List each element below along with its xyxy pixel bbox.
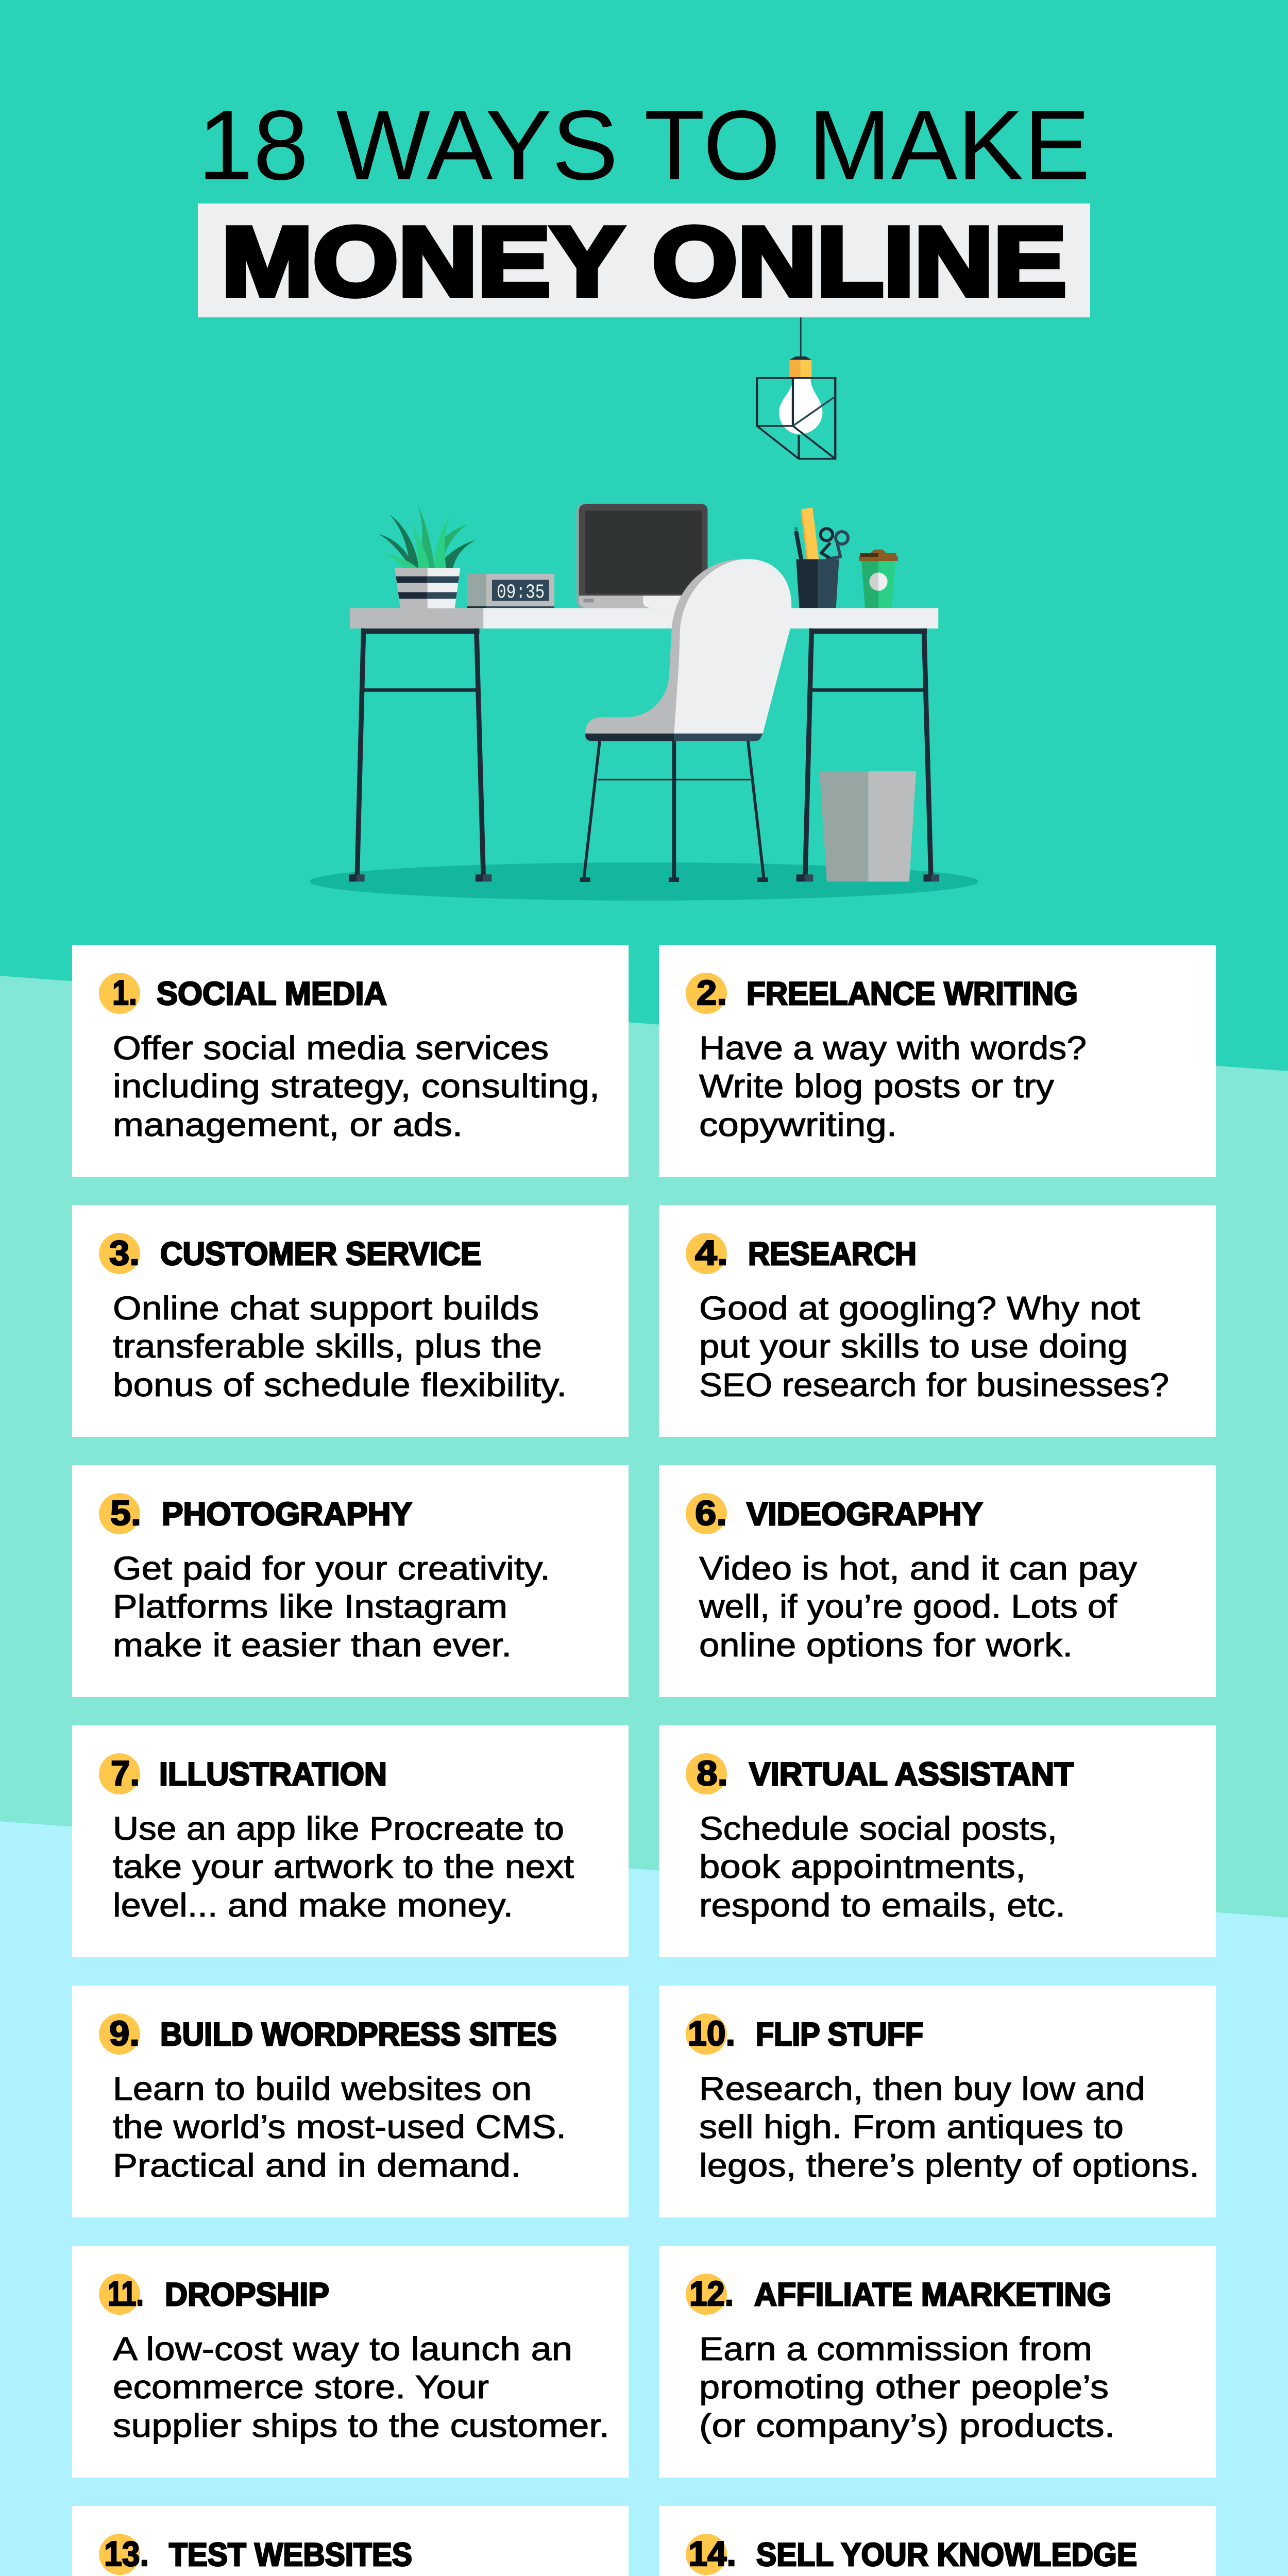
card background — [659, 2246, 1216, 2478]
body text: Use an app like Procreate to — [113, 1810, 564, 1847]
body text: book appointments, — [699, 1848, 1026, 1885]
body text: Earn a commission from — [699, 2330, 1092, 2367]
number badge — [99, 2274, 140, 2315]
heading: SOCIAL MEDIA — [157, 976, 387, 1012]
title line: 18 ways to make: 18 WAYS TO MAKE — [198, 90, 1090, 200]
icon: potted plant — [378, 505, 476, 608]
number badge — [99, 1233, 140, 1274]
card 14: sell your knowledge — [659, 2506, 1216, 2576]
body text: Schedule social posts, — [699, 1810, 1057, 1847]
icon: coffee cup — [859, 550, 898, 608]
heading: RESEARCH — [748, 1236, 917, 1272]
heading: AFFILIATE MARKETING — [754, 2277, 1111, 2313]
card 7: illustration — [72, 1725, 629, 1957]
number badge — [686, 2013, 727, 2055]
body text — [699, 1550, 1137, 1664]
heading: FLIP STUFF — [756, 2016, 923, 2053]
icon: chair — [580, 559, 791, 882]
card background — [659, 1725, 1216, 1957]
heading: PHOTOGRAPHY — [162, 1496, 412, 1532]
body text: promoting other people’s — [699, 2368, 1109, 2405]
card 11: dropship — [72, 2246, 629, 2478]
body text: Research, then buy low and — [699, 2070, 1145, 2107]
heading: CUSTOMER SERVICE — [160, 1236, 481, 1272]
card background — [659, 1465, 1216, 1697]
body text: supplier ships to the customer. — [113, 2407, 609, 2444]
card background — [659, 2506, 1216, 2576]
desk top — [350, 608, 938, 629]
card 12: affiliate marketing — [659, 2246, 1216, 2478]
heading: DROPSHIP — [165, 2277, 329, 2313]
card background — [72, 2246, 629, 2478]
number: 8. — [697, 1754, 728, 1793]
body text: the world’s most-used CMS. — [113, 2108, 566, 2145]
number badge — [686, 2274, 727, 2315]
card 6: videography — [659, 1465, 1216, 1697]
heading: TEST WEBSITES — [169, 2537, 412, 2573]
card 1: social media — [72, 945, 629, 1177]
body text: online options for work. — [699, 1626, 1073, 1664]
number badge — [686, 1493, 727, 1534]
number: 4. — [695, 1233, 728, 1273]
number: 1. — [112, 973, 137, 1012]
card 3: customer service — [72, 1205, 629, 1437]
body text — [699, 1290, 1169, 1403]
number: 6. — [695, 1494, 727, 1533]
icon: monitor — [577, 504, 707, 608]
number: 11. — [108, 2274, 144, 2313]
card 13: test websites — [72, 2506, 629, 2576]
heading: VIDEOGRAPHY — [747, 1496, 983, 1532]
desk legs left — [349, 629, 492, 882]
icon: digital clock — [467, 574, 554, 608]
body text — [113, 1029, 600, 1143]
card background — [72, 945, 629, 1177]
body text: (or company’s) products. — [699, 2407, 1115, 2444]
body text: legos, there’s plenty of options. — [699, 2147, 1199, 2184]
body text: Offer social media services — [113, 1029, 549, 1066]
body text — [699, 1029, 1087, 1143]
body text: make it easier than ever. — [113, 1626, 512, 1664]
card background — [72, 1986, 629, 2217]
number: 13. — [104, 2534, 149, 2573]
card 8: virtual assistant — [659, 1725, 1216, 1957]
heading: SELL YOUR KNOWLEDGE — [756, 2537, 1137, 2573]
body text — [113, 1290, 567, 1403]
number badge — [99, 2534, 140, 2575]
illustration: desk scene — [310, 317, 978, 901]
body text: Video is hot, and it can pay — [699, 1550, 1137, 1587]
desk legs right — [796, 629, 939, 882]
body text — [113, 1550, 550, 1664]
body text: management, or ads. — [113, 1106, 463, 1143]
icon: digital clock: 09:35 — [497, 581, 545, 604]
body text: Good at googling? Why not — [699, 1290, 1140, 1327]
body text — [113, 2070, 566, 2184]
number: 3. — [109, 1233, 140, 1273]
card 9: build wordpress sites — [72, 1986, 629, 2217]
card 4: research — [659, 1205, 1216, 1437]
card background — [659, 1986, 1216, 2217]
body text: Practical and in demand. — [113, 2147, 521, 2184]
heading: BUILD WORDPRESS SITES — [160, 2016, 557, 2053]
body text: respond to emails, etc. — [699, 1887, 1065, 1924]
number badge — [99, 2013, 140, 2055]
number badge — [686, 1753, 727, 1794]
body text: take your artwork to the next — [113, 1848, 574, 1885]
body text — [113, 1810, 574, 1924]
body text: A low-cost way to launch an — [113, 2330, 572, 2367]
body text — [113, 2330, 609, 2444]
floor shadow — [310, 862, 978, 901]
body text: Write blog posts or try — [699, 1067, 1054, 1105]
card 2: freelance writing — [659, 945, 1216, 1177]
card background — [72, 1465, 629, 1697]
body text — [699, 1810, 1065, 1924]
body text: Online chat support builds — [113, 1290, 539, 1327]
card 5: photography — [72, 1465, 629, 1697]
number badge — [99, 973, 140, 1014]
card background — [72, 1205, 629, 1437]
icon: hanging lamp — [757, 317, 835, 459]
number: 5. — [110, 1494, 141, 1533]
icon: trash can — [820, 771, 916, 882]
heading: ILLUSTRATION — [159, 1756, 387, 1792]
body text: sell high. From antiques to — [699, 2108, 1124, 2145]
body text — [699, 2330, 1115, 2444]
body text: transferable skills, plus the — [113, 1328, 542, 1365]
body text: Platforms like Instagram — [113, 1588, 507, 1625]
body text: copywriting. — [699, 1106, 897, 1143]
card 10: flip stuff — [659, 1986, 1216, 2217]
title highlight box — [198, 204, 1090, 317]
card background — [72, 1725, 629, 1957]
body text: well, if you’re good. Lots of — [699, 1588, 1117, 1625]
body text: level... and make money. — [113, 1887, 513, 1924]
number: 7. — [111, 1754, 140, 1793]
body text: ecommerce store. Your — [113, 2368, 489, 2405]
body text: SEO research for businesses? — [699, 1366, 1169, 1403]
number badge — [99, 1753, 140, 1794]
body text: Have a way with words? — [699, 1029, 1087, 1066]
number badge — [686, 2534, 727, 2575]
number: 14. — [688, 2534, 736, 2573]
number badge — [686, 1233, 727, 1274]
body text — [699, 2070, 1199, 2184]
number badge — [686, 973, 727, 1014]
icon: pen cup — [796, 507, 848, 608]
body text: bonus of schedule flexibility. — [113, 1366, 567, 1403]
body text: including strategy, consulting, — [113, 1067, 600, 1105]
number badge — [99, 1493, 140, 1534]
body text: Get paid for your creativity. — [113, 1550, 550, 1587]
number: 9. — [109, 2014, 140, 2053]
body text: Learn to build websites on — [113, 2070, 532, 2107]
heading: FREELANCE WRITING — [747, 976, 1078, 1012]
title line: money online: MONEY ONLINE — [222, 207, 1066, 316]
title — [198, 90, 1090, 317]
number: 12. — [689, 2274, 734, 2313]
number: 10. — [688, 2014, 735, 2053]
number: 2. — [697, 973, 727, 1012]
card background — [659, 945, 1216, 1177]
card background — [72, 2506, 629, 2576]
heading: VIRTUAL ASSISTANT — [749, 1756, 1074, 1792]
card background — [659, 1205, 1216, 1437]
body text: put your skills to use doing — [699, 1328, 1128, 1365]
